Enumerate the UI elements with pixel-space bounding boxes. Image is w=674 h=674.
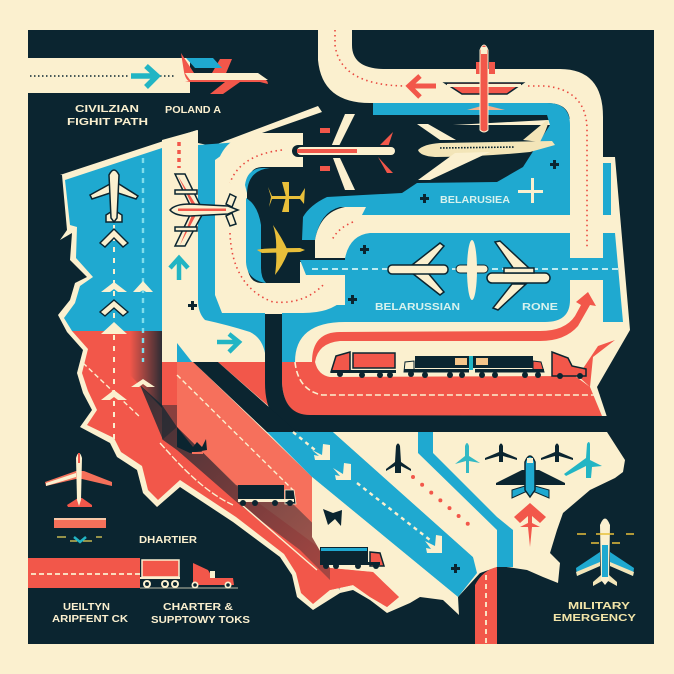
- icon: yellow plane small: [268, 182, 305, 212]
- central dark area: [247, 125, 570, 283]
- dark wedge: [177, 427, 207, 454]
- civilian flight path band: [0, 58, 190, 93]
- panel: south-west red zone: [72, 331, 399, 607]
- arrow: dark: [323, 509, 342, 526]
- blue curved road: [418, 432, 513, 567]
- icon: yellow plane large: [257, 225, 305, 275]
- red dots: [413, 477, 468, 524]
- truck: blue trailer: [320, 547, 384, 569]
- label: military emergency: MILITARY: [568, 601, 630, 612]
- icon: teal plane small: [455, 443, 480, 473]
- label: Poland A: POLAND A: [165, 105, 221, 116]
- panel: central blue and ring: [198, 133, 343, 353]
- cream runway column: [162, 130, 198, 362]
- cream lower triangle: [312, 477, 458, 597]
- bottom red road: [475, 567, 497, 644]
- road dashes: [83, 158, 317, 570]
- panel: Belarus lower zone: [282, 233, 623, 362]
- blue diagonal road: [267, 432, 477, 597]
- label: charter and support: SUPPTOWY TOKS: [151, 615, 250, 626]
- dark diagonal: [193, 362, 297, 432]
- arrow: teal right: [217, 334, 239, 352]
- label: charter and support: [151, 602, 250, 626]
- road shadow: [130, 331, 340, 590]
- label: civilian flight path: CIVILZIAN: [75, 104, 139, 115]
- icon: Belarus plane 3: [487, 241, 550, 310]
- icon: dark plane: [386, 444, 411, 473]
- label: utility airport: [52, 602, 129, 625]
- icon: dark and cream plane two: [541, 444, 573, 462]
- icon: dark and cream plane one: [485, 444, 517, 462]
- icon: cream airliner: [417, 120, 555, 180]
- icon: plane top red: [445, 45, 523, 132]
- dark road curve: [265, 314, 607, 432]
- small blue corner: [177, 343, 192, 362]
- icon: teal cross plane: [518, 178, 543, 203]
- icon: Belarus plane 2: [456, 240, 488, 300]
- map silhouette: [58, 106, 630, 615]
- icon: plane bottom-left: [45, 453, 112, 507]
- panel: north-west blue zone: [64, 148, 162, 331]
- salmon diagonal road: [177, 362, 340, 563]
- icon: military plane: [576, 518, 634, 586]
- small markers: [188, 160, 559, 573]
- label: civilian flight path: FIGHIT PATH: [67, 117, 148, 128]
- label: civilian flight path: [67, 104, 148, 128]
- icon: plane central horizontal: [292, 114, 396, 190]
- runway: bottom left red band: [28, 558, 140, 588]
- label: Dhartier: DHARTIER: [139, 535, 198, 546]
- icon: plane left red: [170, 174, 238, 246]
- icon: plane left cream: [90, 170, 138, 222]
- arrow: teal up: [170, 258, 188, 280]
- red lower road: [282, 292, 615, 416]
- icon: plane top-left: [181, 53, 268, 94]
- label: Rone: RONE: [522, 302, 558, 313]
- arrow: red westward: [409, 76, 436, 97]
- icon: red arrow plane: [514, 503, 546, 547]
- label: utility airport: UEILTYN: [63, 602, 110, 613]
- legend bar: [54, 518, 106, 542]
- icon: Belarus plane 1: [388, 243, 448, 295]
- label: military emergency: [553, 601, 636, 624]
- panel: Belarus upper zone with road: [300, 30, 620, 275]
- trucks: convoy on red road: [331, 352, 586, 379]
- red dotted routes: [230, 30, 587, 302]
- label: Belarusian: BELARUSSIAN: [375, 302, 460, 313]
- icon: teal plane right: [564, 442, 602, 478]
- icon: big blue plane: [496, 456, 565, 498]
- red triangle beside dark road: [218, 362, 296, 430]
- label: utility airport: ARIPFENT CK: [52, 614, 129, 625]
- arrows: chevrons: [100, 229, 155, 400]
- label: charter and support: CHARTER &: [163, 602, 233, 613]
- arrow: flight path: [131, 66, 157, 87]
- truck: diagonal road: [238, 485, 296, 506]
- red dashes: [177, 142, 181, 168]
- label: Belarus upper: BELARUSIEA: [440, 195, 510, 206]
- trucks: charter and support: [140, 560, 238, 588]
- arrows: diagonal white: [312, 444, 442, 553]
- label: military emergency: EMERGENCY: [553, 613, 636, 624]
